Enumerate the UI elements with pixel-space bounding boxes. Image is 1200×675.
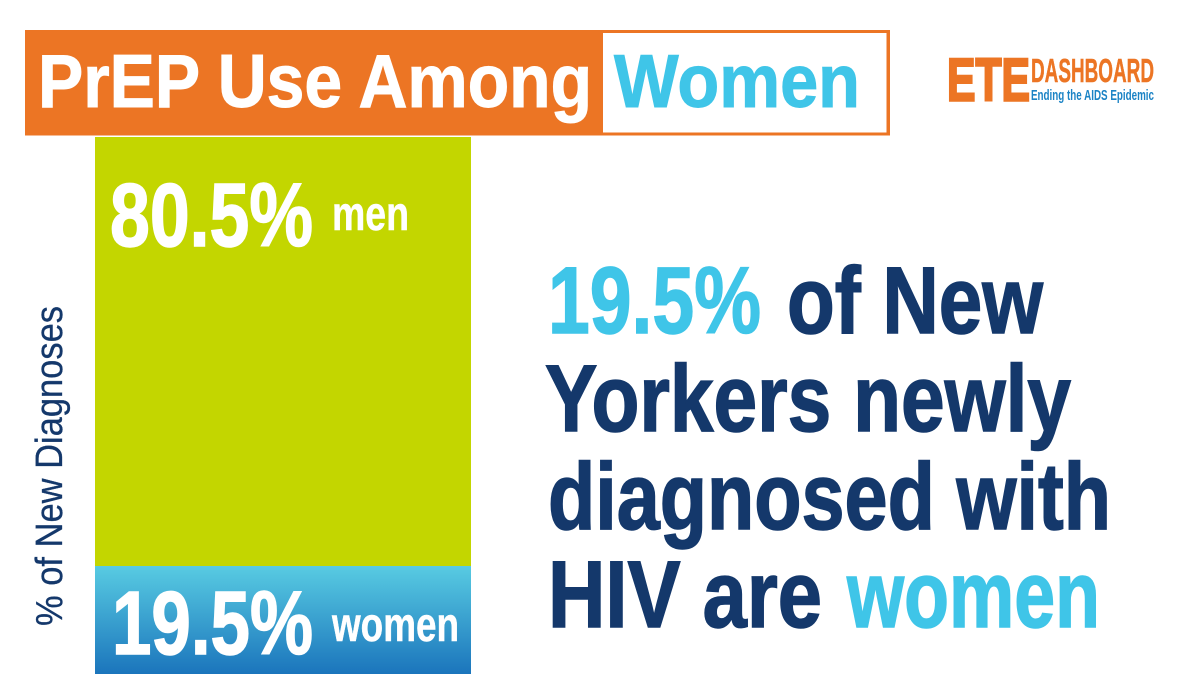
main statement: of New xyxy=(787,248,1044,354)
title banner xyxy=(25,30,890,136)
y-axis label: % of New Diagnoses xyxy=(29,306,71,626)
bar segment: men: 80.5% xyxy=(110,166,313,266)
main statement: Yorkers newly xyxy=(545,346,1071,452)
title: Women: Women xyxy=(614,39,860,123)
bar segment: men xyxy=(95,137,471,566)
title: PrEP Use Among: PrEP Use Among xyxy=(38,39,592,123)
logo: ETE Dashboard xyxy=(947,46,1154,114)
bar segment: women: 19.5% xyxy=(112,574,313,674)
main statement: 19.5% xyxy=(548,248,761,354)
main statement: HIV are xyxy=(548,542,822,648)
bar segment: women: women xyxy=(331,599,459,652)
bar segment: women xyxy=(95,566,471,674)
logo: ETE Dashboard: ETE xyxy=(947,46,1030,114)
bar segment: men: men xyxy=(332,188,409,241)
main statement xyxy=(545,248,1111,648)
stacked bar chart xyxy=(95,137,471,674)
main statement: women xyxy=(846,542,1100,648)
